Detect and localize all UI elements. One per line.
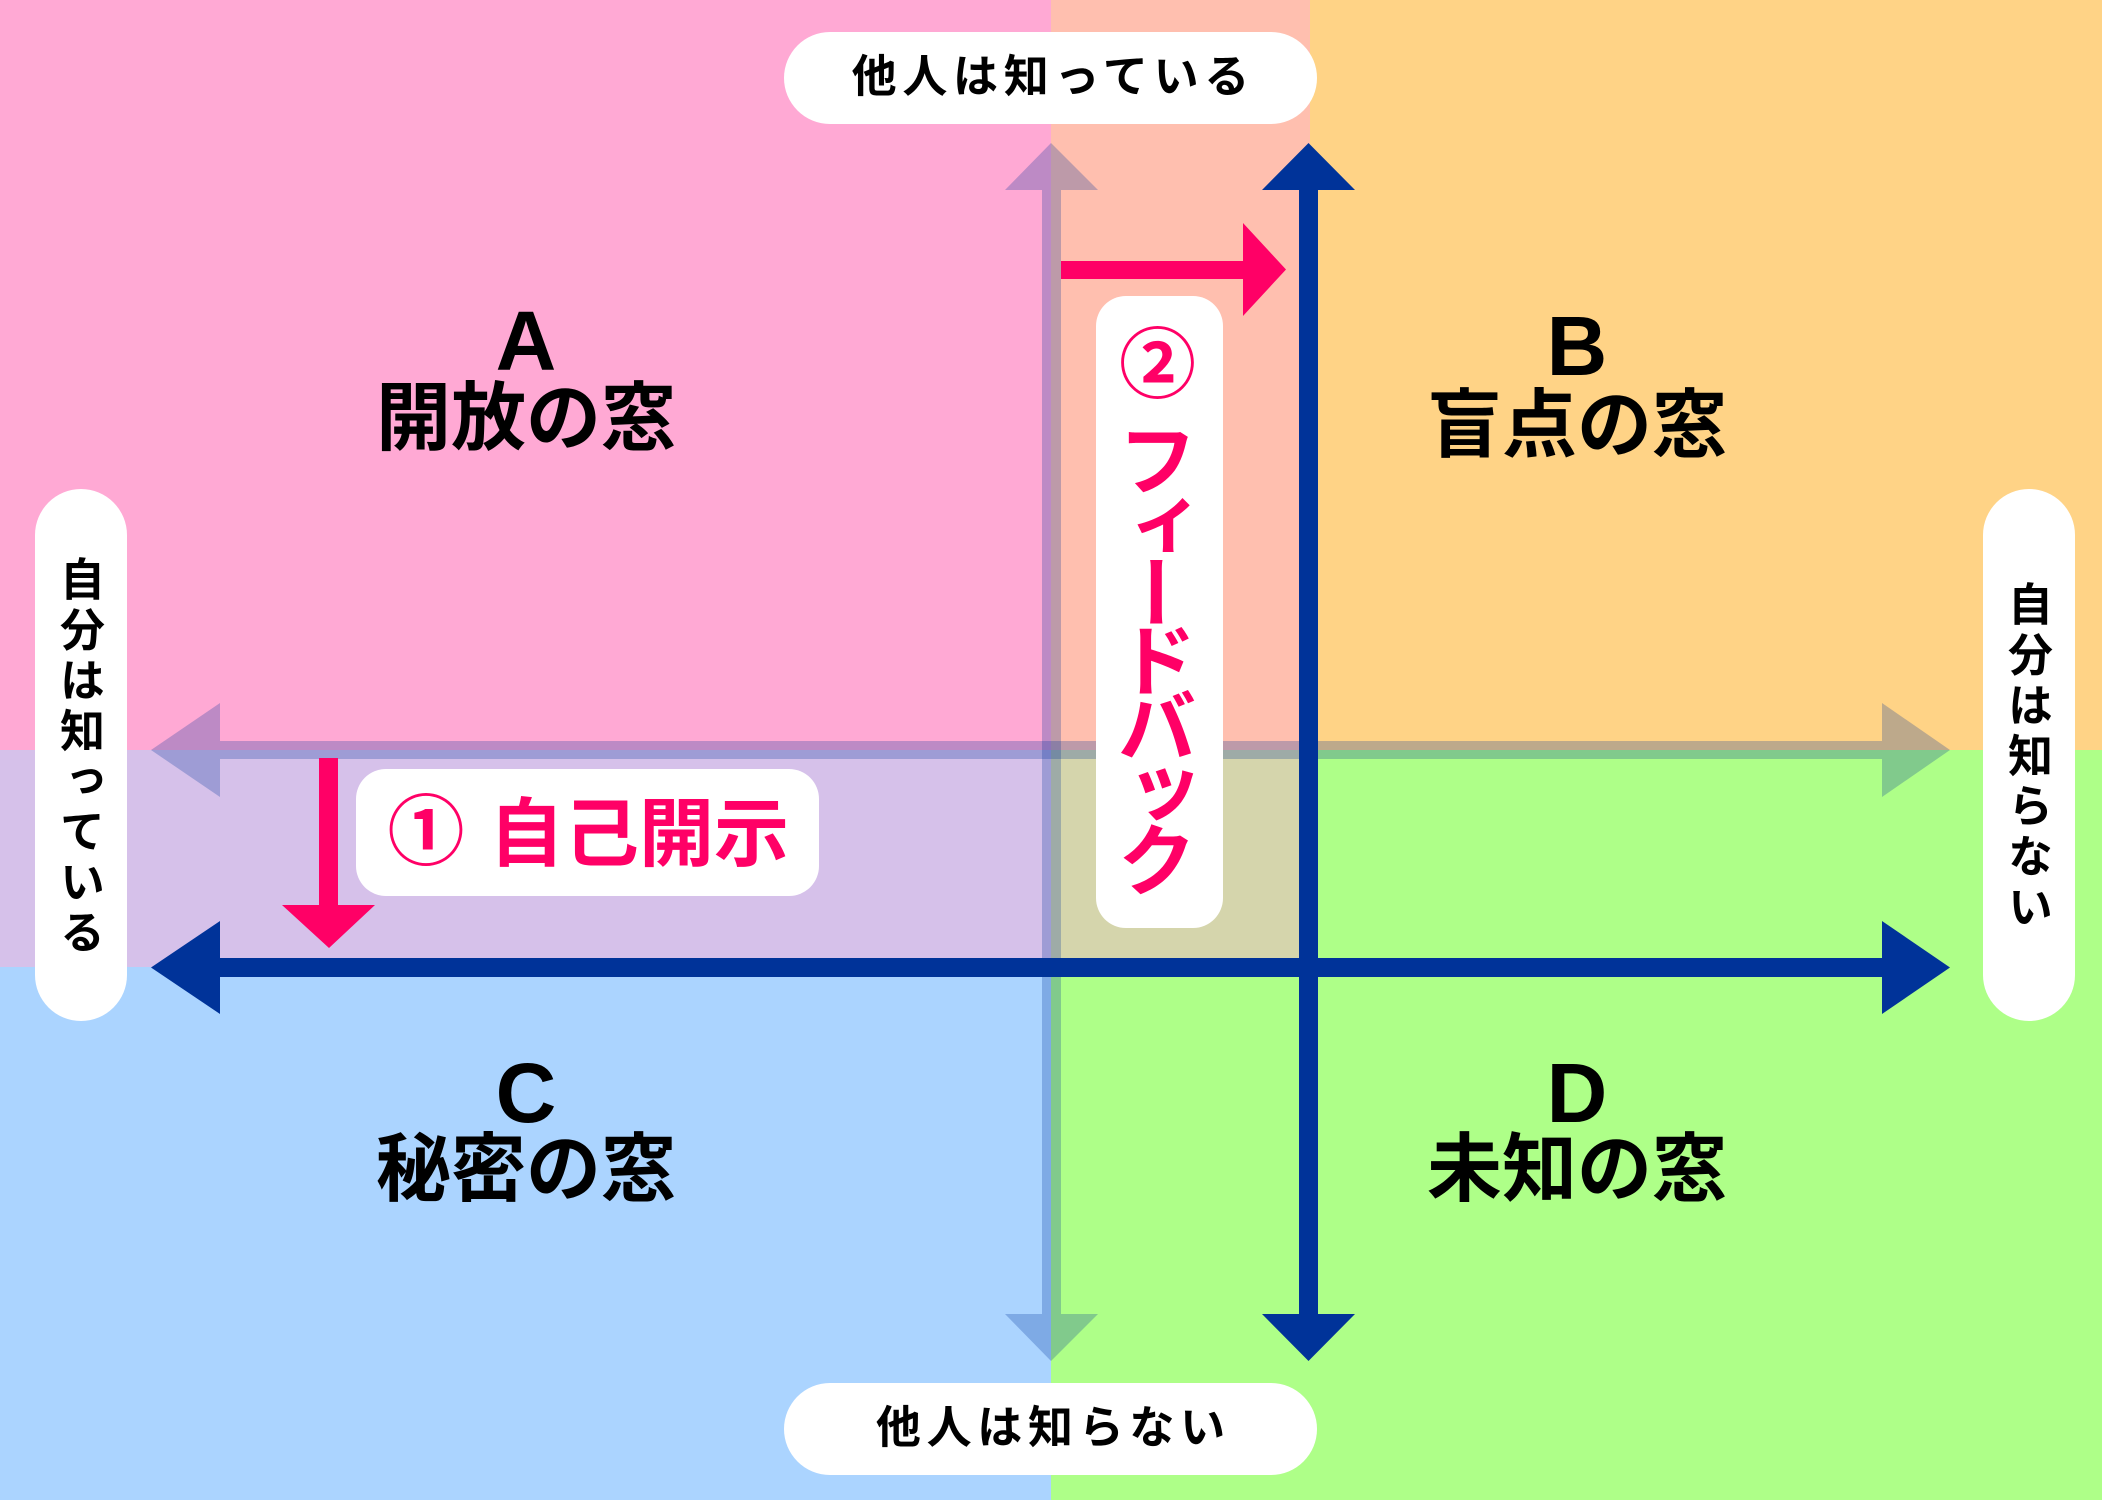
arrow: self-disclosure shift down <box>282 758 375 948</box>
heading: 秘密の窓: 秘密の窓 <box>376 1127 676 1211</box>
letter B: B <box>1547 299 1607 393</box>
number: circled 1: ① <box>388 790 464 876</box>
expanded band: self-disclosure region <box>0 750 1051 967</box>
pill: self knows <box>35 489 127 1021</box>
panel: C 秘密の窓 <box>0 750 1051 1500</box>
label: 自分は知らない: 自分は知らない <box>2001 581 2052 934</box>
pill: others do not know <box>784 1383 1317 1475</box>
callout: self-disclosure <box>356 769 819 896</box>
heading: 盲点の窓: 盲点の窓 <box>1427 383 1727 467</box>
arrow: vertical axis <box>1262 143 1355 1361</box>
expanded band: feedback region <box>1051 0 1310 750</box>
overlap band: olive region <box>1051 750 1310 967</box>
letter D: D <box>1547 1046 1607 1140</box>
panel: A 開放の窓 <box>0 0 1051 750</box>
arrow: faded original horizontal axis <box>151 703 1950 797</box>
number: circled 2: ② <box>1119 323 1196 409</box>
label: 他人は知らない: 他人は知らない <box>876 1402 1231 1453</box>
pill: self does not know <box>1983 489 2075 1021</box>
arrow: horizontal axis <box>151 921 1950 1014</box>
panel: B 盲点の窓 <box>1051 0 2102 750</box>
letter A: A <box>496 294 556 388</box>
pill: others know <box>784 32 1317 124</box>
callout: feedback <box>1096 296 1223 928</box>
arrow: feedback shift right <box>1061 223 1286 316</box>
arrow: faded original vertical axis <box>1005 143 1098 1361</box>
label: 他人は知っている: 他人は知っている <box>852 51 1255 102</box>
text: 自己開示: 自己開示 <box>489 792 789 876</box>
text: フィードバック: フィードバック <box>1106 419 1195 887</box>
label: 自分は知っている: 自分は知っている <box>53 556 104 959</box>
heading: 開放の窓: 開放の窓 <box>376 376 676 460</box>
letter C: C <box>496 1046 556 1140</box>
panel: D 未知の窓 <box>1051 750 2102 1500</box>
heading: 未知の窓: 未知の窓 <box>1427 1127 1727 1211</box>
